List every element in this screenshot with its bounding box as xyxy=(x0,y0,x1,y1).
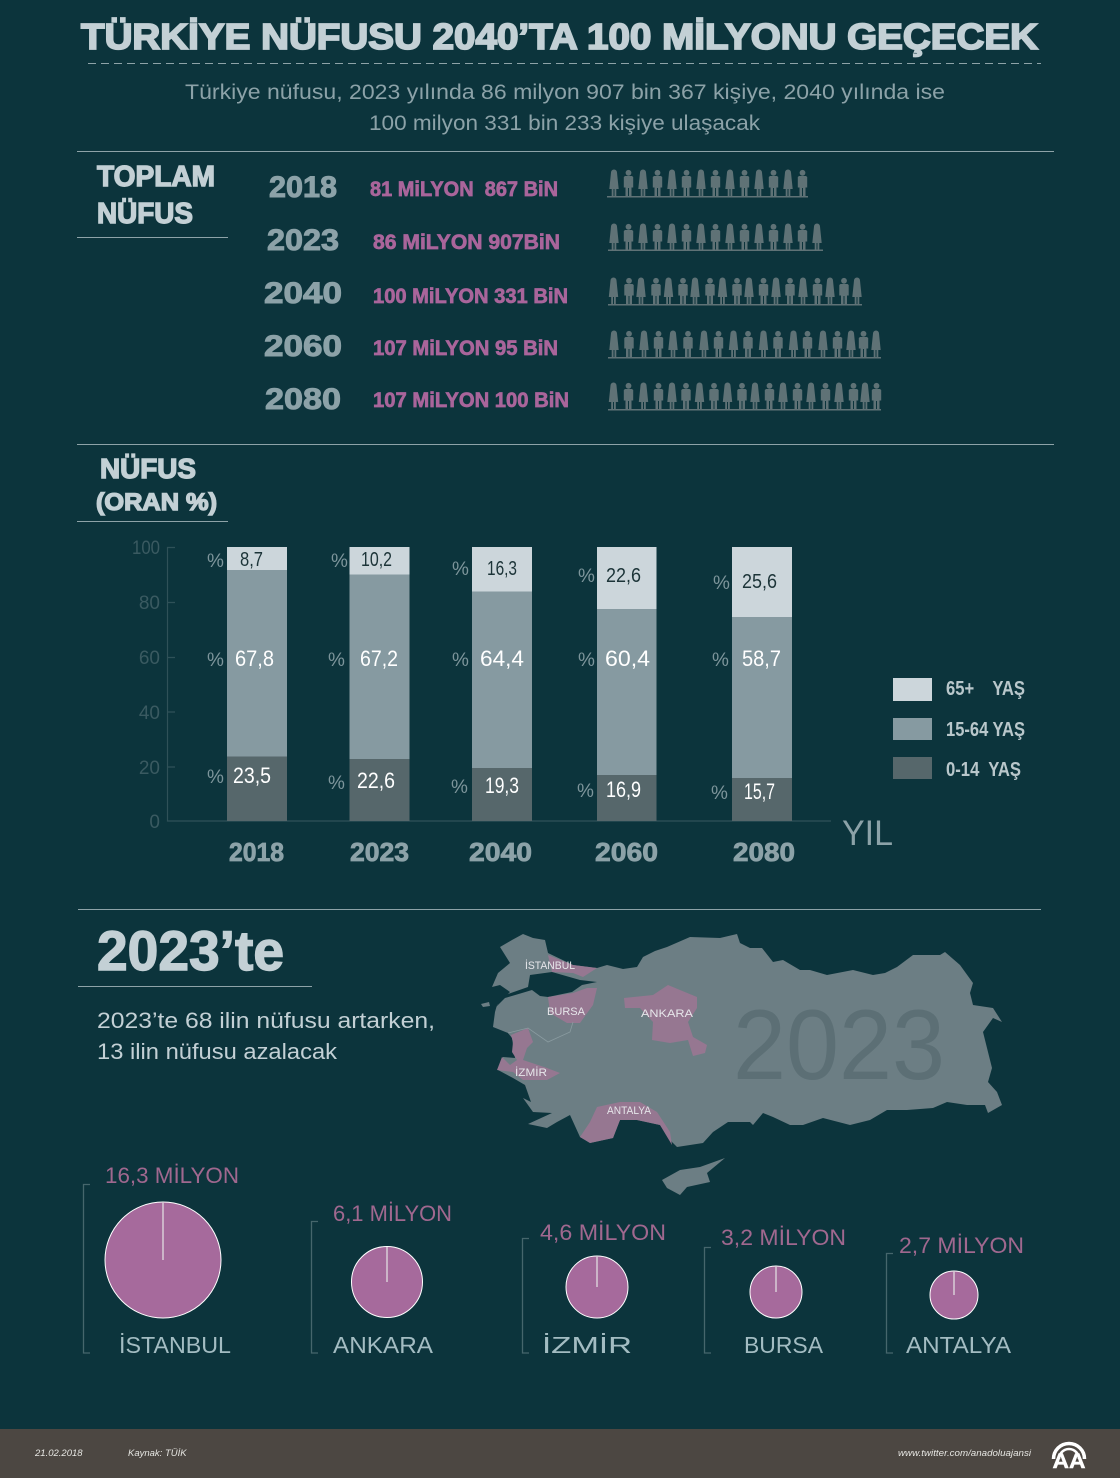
island xyxy=(481,1002,490,1007)
bar 2060 xyxy=(577,547,658,867)
map labels: İSTANBUL xyxy=(525,959,575,972)
bar 2023: 67,2 xyxy=(360,646,398,671)
panel: İstanbul population: 16,3 MİLYON xyxy=(105,1163,239,1188)
map watermark year: 2023 xyxy=(733,989,945,1100)
row 2023: 86 MiLYON 907BiN xyxy=(373,231,560,254)
chart axes: 100 xyxy=(132,538,160,559)
bar 2040: % xyxy=(452,559,469,580)
panel: İzmir population: 4,6 MİLYON xyxy=(540,1220,666,1245)
legend xyxy=(893,678,1025,781)
region: İstanbul xyxy=(548,955,597,977)
bar 2080: 15,7 xyxy=(744,779,775,804)
row 2080 xyxy=(265,382,881,416)
row 2040: 2040 xyxy=(264,277,342,310)
bar 2080: % xyxy=(712,650,729,671)
panel: Bursa population: 3,2 MİLYON xyxy=(721,1225,846,1250)
row 2080: 2080 xyxy=(265,383,341,416)
row 2060: 107 MiLYON 95 BiN xyxy=(373,337,558,360)
chart axes: 60 xyxy=(139,648,160,669)
panel: İstanbul population: İSTANBUL xyxy=(119,1332,231,1358)
row 2060 xyxy=(264,330,881,363)
bar 2018: 8,7 xyxy=(240,549,263,571)
bar 2060: 22,6 xyxy=(606,565,641,587)
bar 2040: % xyxy=(452,650,469,671)
icon: AA logo: AA xyxy=(1052,1450,1086,1473)
footer xyxy=(0,1429,1120,1478)
bar 2018: 2018 xyxy=(229,837,284,867)
panel: İstanbul population xyxy=(84,1163,239,1358)
bar 2040: % xyxy=(451,777,468,798)
heading: nüfus oran: NÜFUS xyxy=(100,453,196,484)
map labels: BURSA xyxy=(547,1006,586,1018)
panel: Ankara population xyxy=(312,1201,452,1358)
bar 2080: 2080 xyxy=(733,837,795,867)
heading: 2023'te: 2023’te xyxy=(97,919,284,982)
row 2023 xyxy=(267,224,823,257)
bar 2018: % xyxy=(207,767,224,788)
bar 2080 xyxy=(711,547,795,867)
heading: nüfus oran: (ORAN %) xyxy=(96,489,217,516)
bar 2060: % xyxy=(578,650,595,671)
Cyprus xyxy=(662,1158,725,1195)
bar 2080: % xyxy=(711,783,728,804)
heading: toplam nüfus: NÜFUS xyxy=(97,197,193,230)
bar 2018: % xyxy=(207,551,224,572)
row 2040 xyxy=(264,277,862,310)
text block: 2023 description xyxy=(97,1008,435,1064)
row 2018: 2018 xyxy=(269,171,337,204)
bar 2018 xyxy=(207,547,287,867)
text block: 2023 description: 13 ilin nüfusu azalacak xyxy=(97,1039,338,1064)
bar 2040 xyxy=(451,547,532,867)
subtitle: 100 milyon 331 bin 233 kişiye ulaşacak xyxy=(369,112,761,135)
bar 2023: % xyxy=(328,650,345,671)
bar 2080: % xyxy=(713,573,730,594)
row 2080: 107 MiLYON 100 BiN xyxy=(373,389,569,412)
region: Bursa xyxy=(548,988,597,1023)
chart axes: 80 xyxy=(139,593,160,614)
row 2018: 81 MiLYON 867 BiN xyxy=(370,178,558,201)
panel: Bursa population xyxy=(704,1225,846,1358)
bar 2040: 16,3 xyxy=(487,558,517,580)
map labels xyxy=(515,959,694,1117)
map labels: İZMİR xyxy=(515,1066,547,1079)
chart axes: 0 xyxy=(149,812,160,833)
sea of Marmara xyxy=(494,972,597,1009)
chart axes xyxy=(132,538,831,833)
subtitle: Türkiye nüfusu, 2023 yılında 86 milyon 907 bin 367 kişiye, 2040 yılında ise xyxy=(185,81,945,104)
bar 2040: 64,4 xyxy=(480,646,524,671)
row 2023: 2023 xyxy=(267,224,339,257)
footer: 21.02.2018 xyxy=(34,1448,83,1459)
bar 2040: 19,3 xyxy=(485,773,519,798)
bar 2060: 16,9 xyxy=(606,777,641,802)
row 2018 xyxy=(269,170,808,204)
bar 2060: 60,4 xyxy=(605,646,650,671)
region: Ankara xyxy=(624,985,707,1056)
legend: 65+ YAŞ xyxy=(946,678,1025,700)
stacked bar chart xyxy=(132,538,893,867)
panel: Antalya population: ANTALYA xyxy=(906,1332,1012,1358)
bar 2018: 23,5 xyxy=(233,763,271,788)
map labels: ANKARA xyxy=(641,1008,694,1020)
heading: toplam nüfus: TOPLAM xyxy=(97,161,215,193)
panel: İzmir population: İZMİR xyxy=(542,1332,632,1358)
chart axes: 20 xyxy=(139,758,160,779)
map labels: ANTALYA xyxy=(607,1105,652,1117)
region: İzmir xyxy=(497,1028,560,1080)
heading: nüfus oran xyxy=(77,453,228,522)
row 2040: 100 MiLYON 331 BiN xyxy=(373,285,568,308)
bar 2023: 22,6 xyxy=(357,768,395,793)
panel: Antalya population xyxy=(886,1233,1024,1358)
title: TÜRKİYE NÜFUSU 2040’TA 100 MİLYONU GEÇECEK xyxy=(81,16,1038,57)
legend: 15-64 YAŞ xyxy=(946,719,1025,741)
panel: Ankara population: 6,1 MİLYON xyxy=(333,1201,452,1226)
bar 2080: 25,6 xyxy=(742,571,777,593)
heading: toplam nüfus xyxy=(77,161,228,238)
subtitle xyxy=(185,81,945,135)
panel: Bursa population: BURSA xyxy=(744,1332,824,1358)
bar 2023: % xyxy=(328,773,345,794)
legend: 0-14 YAŞ xyxy=(946,759,1021,781)
bar 2023 xyxy=(328,547,410,867)
chart axes: 40 xyxy=(139,703,160,724)
map: Turkey xyxy=(481,934,1002,1195)
region: Antalya xyxy=(580,1102,672,1145)
bar 2060: % xyxy=(578,566,595,587)
bar 2060: 2060 xyxy=(595,837,658,867)
footer: Kaynak: TÜİK xyxy=(128,1448,187,1459)
panel: total population rows xyxy=(264,170,881,416)
panel: Antalya population: 2,7 MİLYON xyxy=(899,1233,1024,1258)
bar 2018: % xyxy=(207,650,224,671)
bar 2023: 10,2 xyxy=(361,549,392,571)
panel: Ankara population: ANKARA xyxy=(333,1332,434,1358)
bar 2060: % xyxy=(577,781,594,802)
bar 2023: % xyxy=(331,551,348,572)
footer: www.twitter.com/anadoluajansi xyxy=(898,1448,1032,1459)
row 2060: 2060 xyxy=(264,330,342,363)
bar 2040: 2040 xyxy=(469,837,532,867)
bar 2080: 58,7 xyxy=(742,646,781,671)
panel: İzmir population xyxy=(522,1220,666,1358)
text block: 2023 description: 2023’te 68 ilin nüfusu artarken, xyxy=(97,1008,435,1033)
axis label: YIL xyxy=(842,814,893,853)
bar 2018: 67,8 xyxy=(235,646,274,671)
bar 2023: 2023 xyxy=(350,837,409,867)
